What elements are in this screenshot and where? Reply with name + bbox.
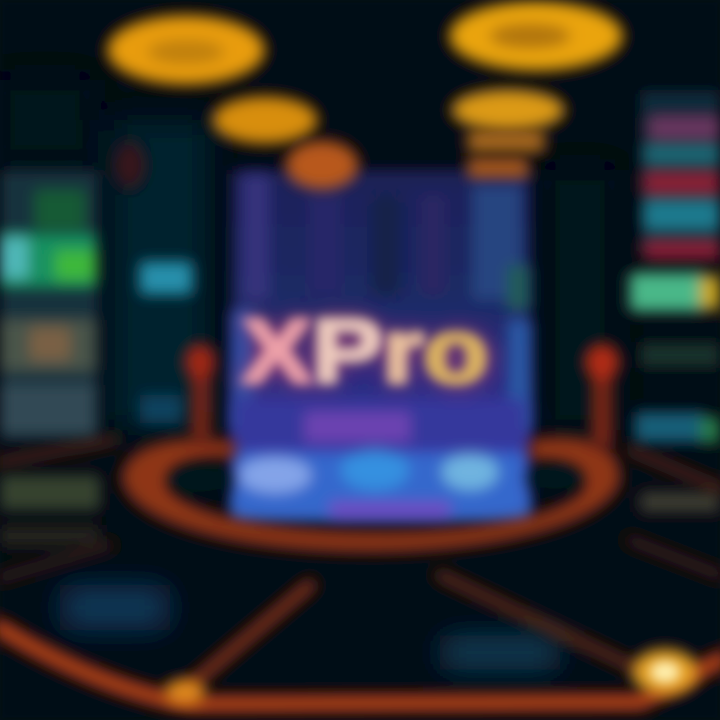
stage inner shadow — [168, 463, 583, 496]
icon: small cyan screen — [114, 141, 192, 423]
icon: hanging lights right — [450, 2, 622, 178]
icon: left red post — [185, 344, 215, 443]
background glows — [0, 80, 615, 670]
panel: central screen — [232, 170, 530, 520]
title: XPro: XPro — [238, 298, 492, 405]
panel: right wall screen — [630, 90, 720, 512]
icon: right red post — [585, 344, 619, 448]
icon: hanging lights left — [108, 16, 358, 189]
screen stripes — [232, 175, 530, 430]
icon: floor glow spots — [165, 650, 697, 704]
screen bottom glow — [235, 400, 525, 518]
title: XPro: XPro — [242, 302, 488, 402]
icon: round table stage — [122, 437, 620, 552]
icon: floor light tracks — [0, 440, 720, 704]
panel: left wall screen — [0, 170, 100, 547]
